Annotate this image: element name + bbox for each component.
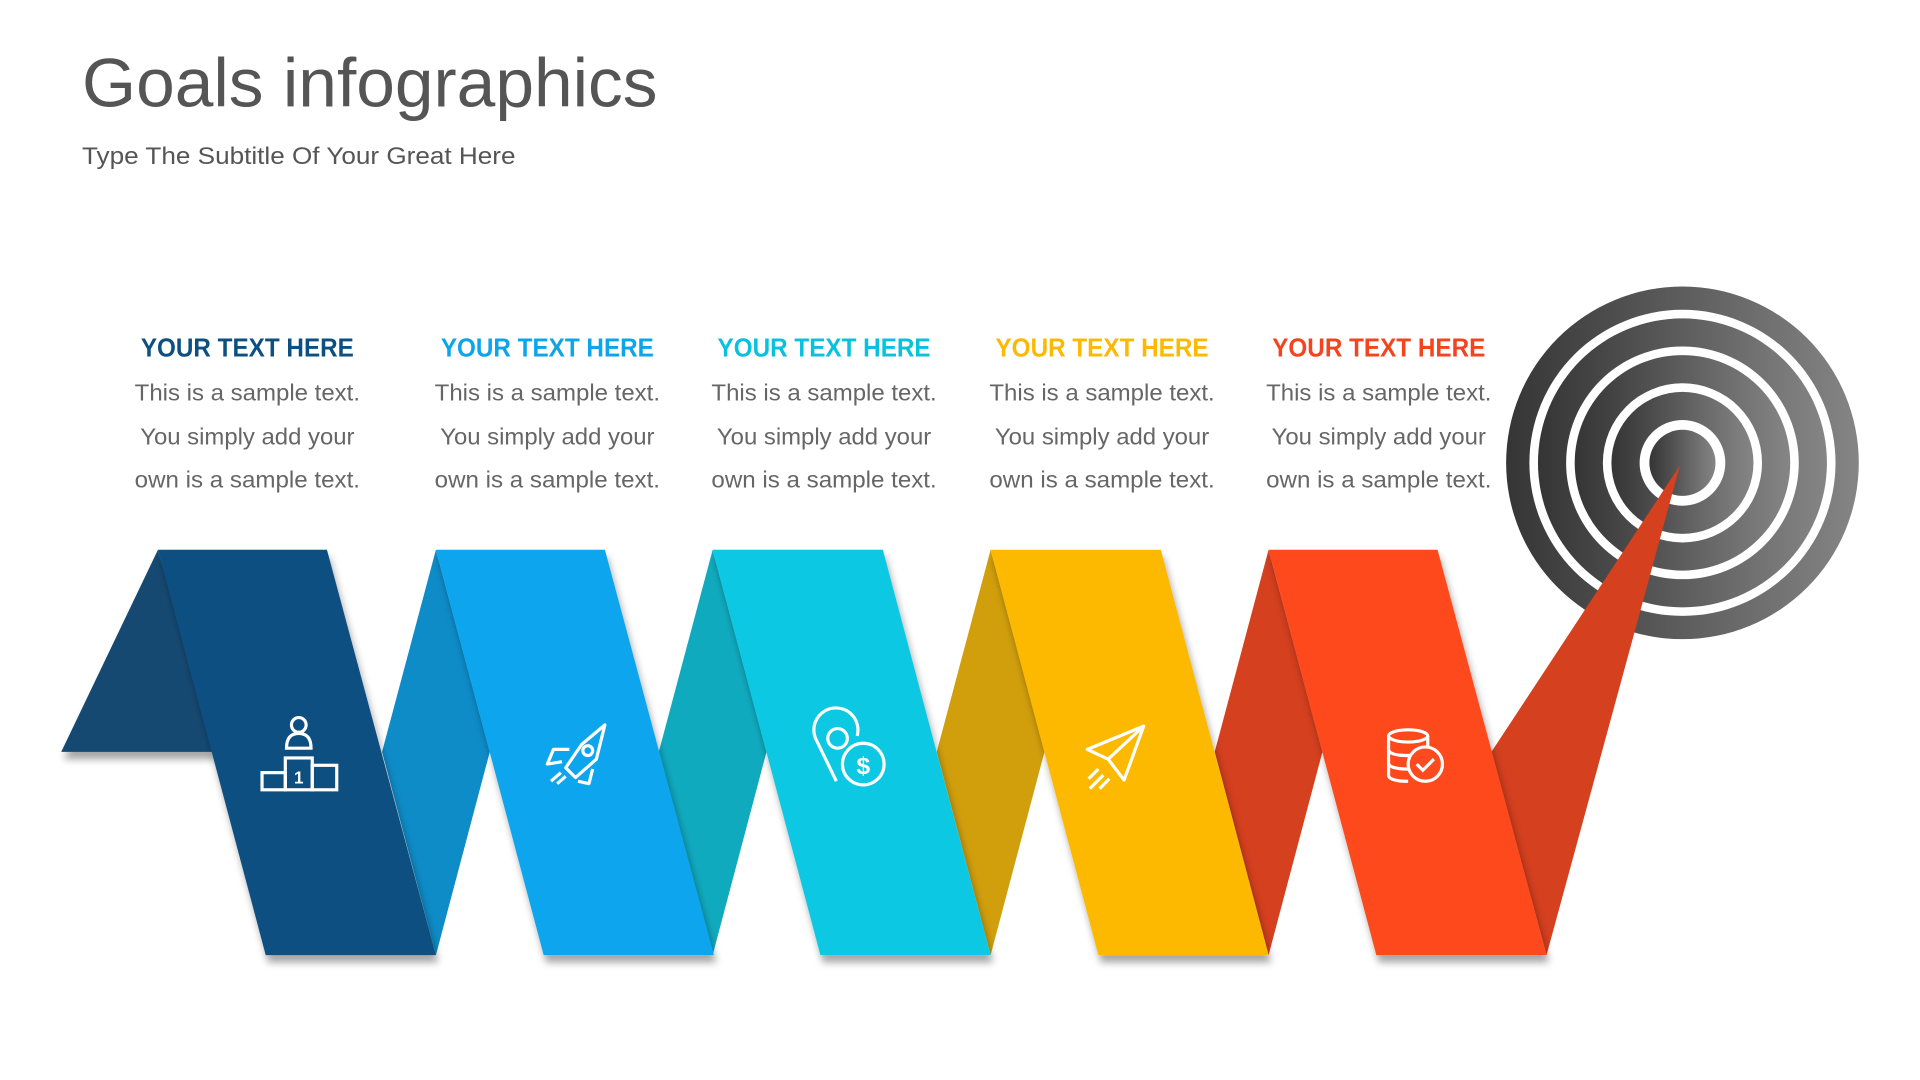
icon: podium: 1: [294, 768, 304, 788]
text block 3: You simply add your: [717, 423, 931, 449]
band 2: [436, 550, 714, 955]
text block 5: YOUR TEXT HERE: [1272, 334, 1485, 362]
fold 3: [937, 550, 1044, 955]
text block 1: YOUR TEXT HERE: [141, 334, 354, 362]
text block 1: This is a sample text.: [135, 379, 360, 405]
text block 5: This is a sample text.: [1266, 379, 1491, 405]
fold 1: [382, 550, 490, 955]
title: Goals infographics: [82, 45, 658, 122]
text block 3: YOUR TEXT HERE: [718, 334, 931, 362]
text block 2: YOUR TEXT HERE: [441, 334, 654, 362]
band 3: [713, 550, 991, 955]
text block 2: You simply add your: [440, 423, 655, 449]
text block 4: This is a sample text.: [989, 379, 1215, 405]
band 4: [991, 550, 1269, 955]
left fold: [61, 550, 214, 752]
text block 3: own is a sample text.: [711, 466, 937, 492]
band 5: [1269, 550, 1547, 955]
pointer to target: [1491, 465, 1680, 955]
text block 2: This is a sample text.: [435, 379, 660, 405]
icon: location money: [814, 708, 884, 785]
text block 5: [1266, 334, 1491, 492]
icon: paper plane: [1087, 726, 1144, 789]
text block 1: [135, 334, 360, 492]
icon: location money: $: [856, 753, 870, 780]
text block 4: [989, 334, 1215, 492]
icon: database check: [1389, 730, 1442, 781]
text block 1: own is a sample text.: [135, 466, 360, 492]
text block 2: own is a sample text.: [435, 466, 660, 492]
fold 4: [1215, 550, 1322, 955]
icon: rocket: [547, 725, 605, 784]
text block 2: [435, 334, 660, 492]
text block 4: own is a sample text.: [989, 466, 1215, 492]
fold 2: [659, 550, 767, 955]
text block 3: This is a sample text.: [711, 379, 937, 405]
ribbon: [61, 465, 1680, 955]
text block 5: You simply add your: [1272, 423, 1486, 449]
text block 4: YOUR TEXT HERE: [996, 334, 1209, 362]
text block 4: You simply add your: [995, 423, 1209, 449]
target: [1506, 287, 1859, 639]
band 1: [158, 550, 436, 955]
subtitle: Type The Subtitle Of Your Great Here: [82, 143, 516, 170]
text block 1: You simply add your: [140, 423, 355, 449]
text block 3: [711, 334, 937, 492]
text block 5: own is a sample text.: [1266, 466, 1491, 492]
icon: podium: [262, 718, 337, 790]
